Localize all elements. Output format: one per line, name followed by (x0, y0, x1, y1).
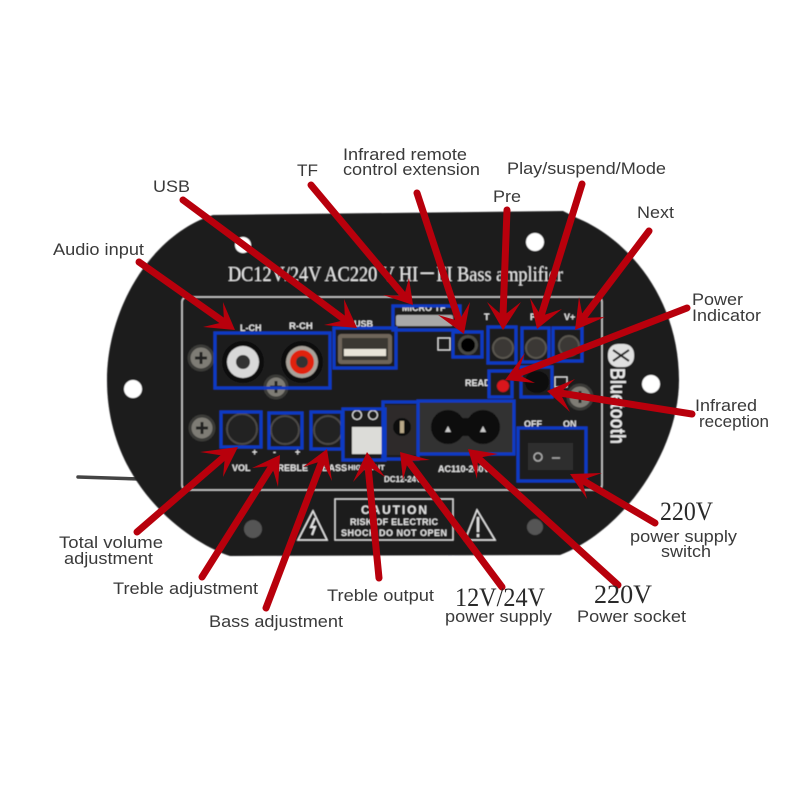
panel labels: + (295, 447, 300, 457)
panel labels: AC110-240V (438, 464, 490, 474)
label: treble adjustment: Treble adjustment (113, 579, 258, 598)
plate body (107, 211, 679, 556)
amplifier plate (107, 211, 679, 556)
panel labels: BASS (322, 463, 347, 473)
label: 220V power supply switch (630, 497, 738, 561)
label: 12V/24V power supply (445, 583, 553, 626)
caution box: RISK OF ELECTRIC (350, 517, 438, 527)
arrow: treble (202, 455, 280, 577)
label: play suspend mode: Play/suspend/Mode (507, 159, 666, 178)
arrow: next (575, 231, 649, 330)
panel labels: P (530, 312, 536, 322)
panel labels: V+ (564, 312, 575, 322)
label: pre: Pre (493, 187, 521, 206)
label: infrared remote control extension (343, 145, 480, 179)
panel labels: READ (465, 378, 491, 388)
power socket (419, 402, 513, 453)
label: treble output: Treble output (327, 586, 434, 605)
arrow: infrared reception (547, 379, 692, 414)
IR extension jack (458, 335, 478, 355)
arrow: TF (311, 185, 413, 305)
RCA jack left (222, 341, 264, 383)
TF slot (396, 315, 453, 326)
label: bass adjustment: Bass adjustment (209, 612, 343, 631)
plate title: DC12V/24V AC220 V HI－FI Bass amplifier (228, 262, 563, 286)
label: TF: TF (297, 161, 318, 180)
panel labels (225, 303, 576, 484)
panel labels: + (252, 447, 257, 457)
label: audio input: Audio input (53, 240, 144, 259)
arrow: power socket (468, 449, 618, 585)
arrow: treble output (353, 452, 385, 578)
panel labels: HIGH OUT (348, 463, 385, 472)
panel labels: VOL (232, 463, 251, 473)
mounting holes (124, 233, 660, 398)
label: total volume adjustment (59, 533, 163, 568)
arrow: 12V/24V (400, 452, 502, 587)
caution box: SHOCK DO NOT OPEN (341, 528, 447, 538)
warning triangles (298, 510, 495, 540)
label: infrared reception: reception (699, 412, 769, 431)
label: 220V power supply switch: 220V (660, 497, 713, 526)
label: 12V/24V power supply: power supply (445, 607, 553, 626)
label: infrared reception (695, 396, 769, 431)
arrow: infrared remote (417, 193, 470, 334)
arrow: power switch (570, 473, 655, 523)
label: 220V power socket: Power socket (577, 607, 686, 626)
panel labels: USB (354, 319, 374, 329)
label: infrared remote control extension: Infrared remote (343, 145, 467, 164)
DC jack (385, 405, 416, 455)
label: infrared reception: Infrared (695, 396, 757, 415)
label: power indicator: Indicator (692, 306, 761, 325)
USB port (338, 334, 392, 364)
panel labels: T (484, 312, 490, 322)
label: 220V power socket: 220V (594, 580, 652, 609)
label: total volume adjustment: adjustment (64, 549, 153, 568)
caution box (335, 499, 453, 540)
arrow: total volume (137, 447, 238, 532)
panel labels: - (225, 447, 228, 457)
label: 220V power socket (577, 580, 686, 626)
arrow: USB (183, 200, 357, 328)
label: total volume adjustment: Total volume (59, 533, 163, 552)
buttons (493, 336, 579, 358)
arrow: play (530, 184, 582, 329)
arrow: pre (487, 210, 521, 330)
label: 220V power supply switch: power supply (630, 527, 738, 546)
arrow: audio input (139, 262, 235, 330)
label: power indicator: Power (692, 290, 743, 309)
caution box: CAUTION (361, 503, 427, 517)
RCA jack right (281, 341, 323, 383)
panel labels: TREBLE (272, 463, 308, 473)
registered marks (438, 338, 567, 387)
label: 12V/24V power supply: 12V/24V (455, 583, 545, 612)
IR receiver (525, 371, 549, 393)
panel labels: DC12-24V (384, 475, 422, 484)
label: infrared remote control extension: control extension (343, 160, 480, 179)
label: power indicator (692, 290, 761, 325)
panel labels: OFF (524, 419, 542, 429)
panel labels: R-CH (289, 321, 313, 332)
knobs (227, 414, 342, 444)
rocker switch (520, 435, 582, 477)
arrow: power indicator (505, 308, 687, 383)
treble output connector (352, 410, 382, 454)
bluetooth badge: Bluetooth (606, 368, 628, 444)
cable wire (78, 477, 140, 479)
control panel outline (182, 297, 602, 490)
bluetooth badge (606, 344, 634, 444)
label: USB: USB (153, 177, 190, 196)
panel labels: - (273, 447, 276, 457)
bottom rivets (244, 519, 543, 538)
label: next: Next (637, 203, 674, 222)
panel labels: L-CH (240, 323, 262, 333)
label: 220V power supply switch: switch (661, 542, 711, 561)
panel labels: MICRO TF (402, 303, 446, 313)
power LED (497, 380, 509, 392)
panel labels: ON (563, 419, 576, 429)
arrow: bass (266, 449, 332, 608)
blue highlight boxes (215, 306, 586, 481)
screws (189, 346, 592, 440)
